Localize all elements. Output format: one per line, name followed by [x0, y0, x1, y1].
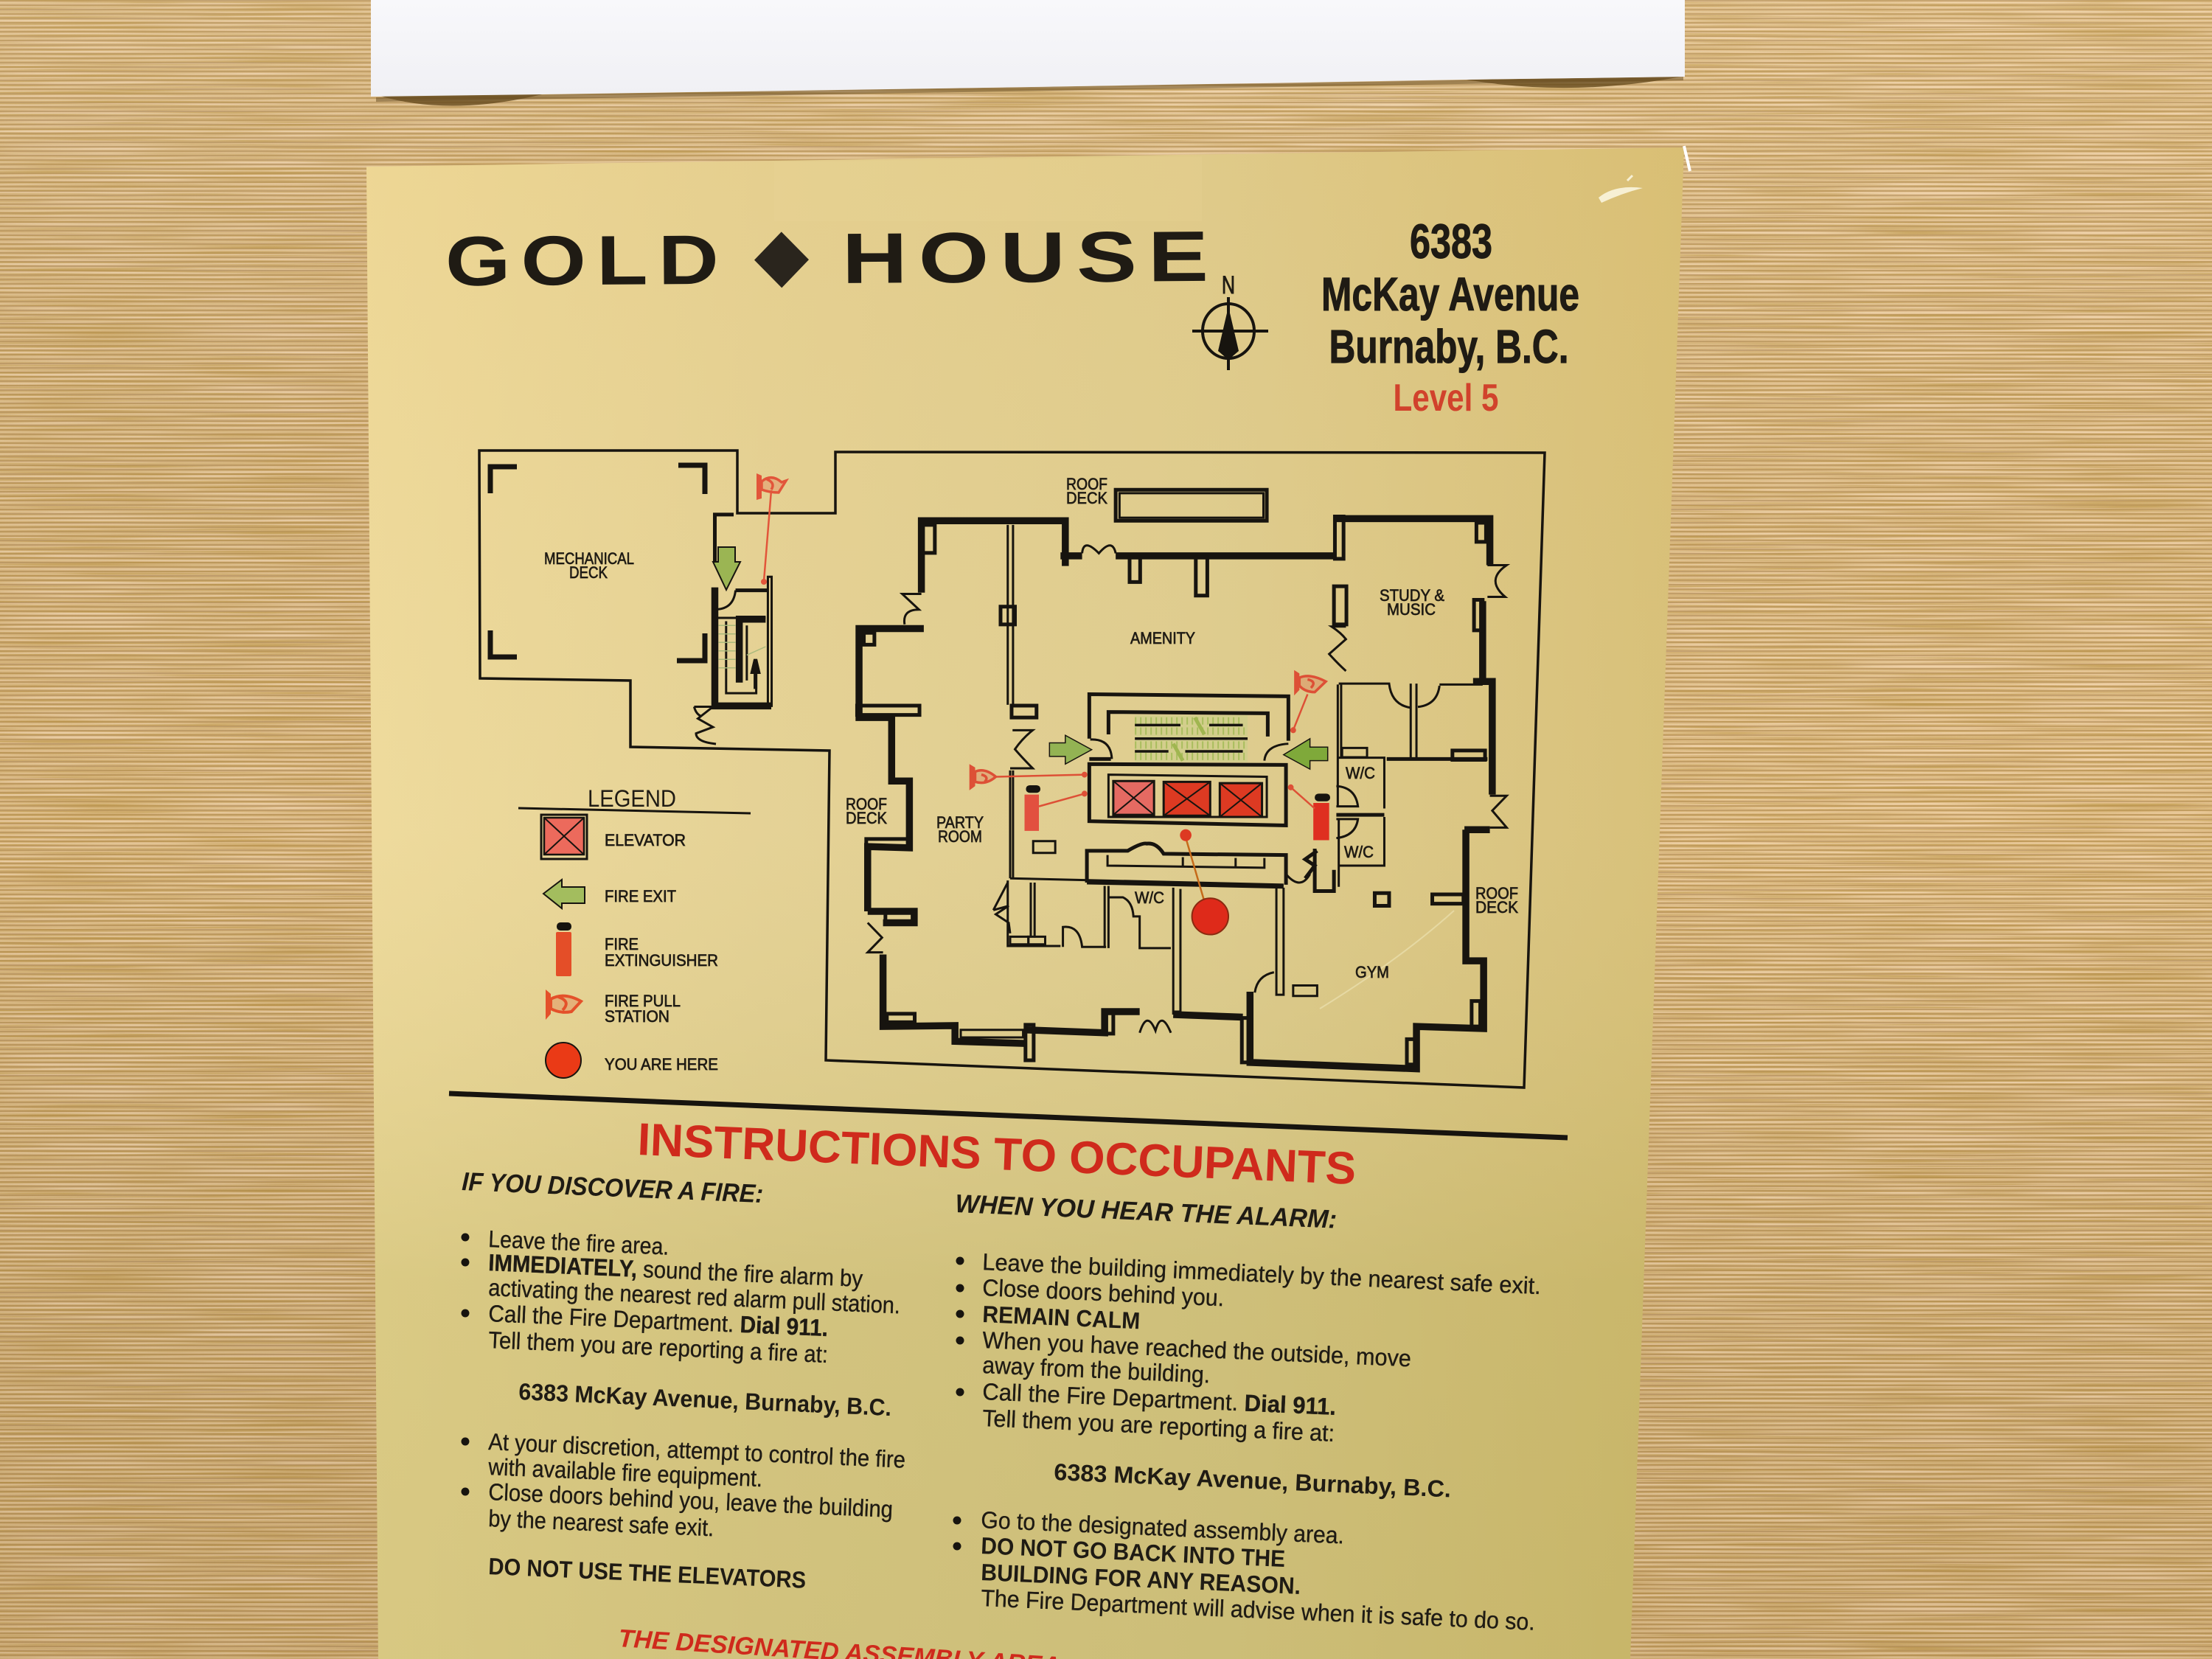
- legend heading: [518, 785, 751, 813]
- instructions: if you discover a fire: Close doors behind you, leave the building: [488, 1478, 894, 1523]
- room labels: ROOM: [938, 827, 982, 846]
- instructions: if you discover a fire: by the nearest safe exit.: [488, 1505, 714, 1541]
- icon: fire pull station at stair: [757, 473, 786, 585]
- legend item: fire extinguisher: [556, 922, 718, 976]
- legend item: fire exit: [543, 880, 676, 908]
- instructions: when you hear the alarm: Call the Fire Department. Dial 911.: [982, 1378, 1337, 1420]
- floor plan: [479, 451, 1545, 1088]
- instructions: if you discover a fire: DO NOT USE THE ELEVATORS: [488, 1553, 807, 1593]
- icon: green exit arrow at stair: [713, 547, 740, 590]
- address block: 6383: [1410, 214, 1492, 268]
- roof deck planter: [1116, 490, 1267, 521]
- instructions: when you hear the alarm: The Fire Department will advise when it is safe to do so.: [981, 1585, 1536, 1635]
- icon: fire pull stations in core: [970, 670, 1326, 790]
- instructions: when you hear the alarm: 6383 McKay Avenue, Burnaby, B.C.: [1054, 1458, 1452, 1503]
- room labels: W/C: [1344, 843, 1374, 861]
- room labels: ROOF: [1066, 475, 1107, 493]
- exit stair: [694, 515, 772, 744]
- instructions: if you discover a fire: 6383 McKay Avenue, Burnaby, B.C.: [518, 1378, 892, 1421]
- left bullets: [462, 1233, 469, 1495]
- instructions: if you discover a fire: Call the Fire Department. Dial 911.: [488, 1300, 829, 1341]
- room labels: [846, 475, 1518, 981]
- room labels: GYM: [1355, 963, 1389, 981]
- address block: [1321, 214, 1579, 420]
- core: stairs: [1089, 695, 1288, 741]
- instructions: if you discover a fire: IF YOU DISCOVER A FIRE:: [462, 1167, 764, 1208]
- instructions: when you hear the alarm: When you have reached the outside, move: [982, 1326, 1412, 1371]
- legend item: you are here: [546, 1043, 718, 1078]
- you are here marker: [1180, 830, 1228, 935]
- address block: McKay Avenue: [1321, 268, 1579, 321]
- legend: [518, 785, 751, 1078]
- instructions: if you discover a fire: At your discretion, attempt to control the fire: [488, 1428, 906, 1473]
- right washrooms: [1336, 684, 1483, 887]
- title: Gold House logo: [445, 216, 1220, 301]
- room labels: AMENITY: [1130, 629, 1195, 647]
- room labels: MUSIC: [1387, 600, 1436, 619]
- instructions: if you discover a fire: IMMEDIATELY, sound the fire alarm by: [488, 1249, 863, 1292]
- double doors: [868, 546, 1506, 1033]
- instructions: when you hear the alarm: Tell them you are reporting a fire at:: [982, 1405, 1335, 1447]
- instructions: when you hear the alarm: Close doors behind you.: [982, 1274, 1225, 1311]
- icon: fire exit arrows at core: [1049, 735, 1328, 769]
- instructions: when you hear the alarm: Leave the building immediately by the nearest safe exit.: [982, 1248, 1542, 1299]
- instructions heading: INSTRUCTIONS TO OCCUPANTS: [636, 1114, 1357, 1194]
- address block: Burnaby, B.C.: [1329, 320, 1569, 373]
- instructions: when you hear the alarm: DO NOT GO BACK INTO THE: [981, 1532, 1286, 1572]
- room labels: W/C: [1346, 764, 1375, 782]
- legend heading: LEGEND: [588, 785, 676, 812]
- instructions: when you hear the alarm: REMAIN CALM: [982, 1301, 1141, 1334]
- instructions: when you hear the alarm: [953, 1189, 1542, 1635]
- core: elevator lobby: [1089, 764, 1286, 825]
- legend item: elevator: ELEVATOR: [605, 831, 686, 849]
- legend item: fire pull station: FIRE PULL: [605, 992, 681, 1010]
- plaque: [366, 146, 1690, 1659]
- mechanical deck: MECHANICAL: [544, 549, 634, 568]
- room labels: DECK: [846, 809, 887, 827]
- room labels: DECK: [1475, 898, 1518, 917]
- room labels: W/C: [1135, 888, 1164, 907]
- icon: fire extinguishers in plan: [1025, 785, 1330, 841]
- exterior walls: [859, 518, 1492, 1069]
- instructions: if you discover a fire: activating the nearest red alarm pull station.: [488, 1274, 901, 1318]
- mechanical deck: [490, 465, 705, 661]
- legend item: fire extinguisher: FIRE: [605, 935, 639, 953]
- white paper sheet above the plaque: [371, 0, 1685, 106]
- legend item: elevator: [541, 815, 686, 859]
- icon: north compass: N: [1222, 271, 1235, 299]
- legend item: you are here: YOU ARE HERE: [605, 1055, 718, 1074]
- building walls: [857, 490, 1506, 1069]
- icon: north compass: [1192, 271, 1268, 370]
- instructions: if you discover a fire: Tell them you are reporting a fire at:: [488, 1326, 829, 1368]
- right bullets: [953, 1256, 964, 1550]
- room labels: DECK: [1066, 489, 1107, 507]
- room labels: PARTY: [936, 813, 984, 832]
- legend item: fire pull station: [546, 990, 681, 1026]
- instructions: if you discover a fire: with available fire equipment.: [487, 1453, 763, 1492]
- scratch over gym: [1320, 911, 1454, 1009]
- instructions: when you hear the alarm: away from the building.: [982, 1352, 1211, 1388]
- instructions: if you discover a fire: [462, 1167, 906, 1593]
- legend item: fire exit: FIRE EXIT: [605, 887, 676, 905]
- instructions: when you hear the alarm: WHEN YOU HEAR THE ALARM:: [955, 1189, 1338, 1234]
- divider rule: [449, 1093, 1568, 1138]
- instructions: when you hear the alarm: BUILDING FOR ANY REASON.: [981, 1559, 1301, 1599]
- legend item: fire pull station: STATION: [605, 1007, 669, 1026]
- elevators: [1113, 781, 1262, 817]
- room labels: ROOF: [846, 795, 887, 813]
- title: Gold House logo: GOLD: [445, 221, 729, 301]
- lower core: [1087, 844, 1286, 887]
- instructions: if you discover a fire: Leave the fire area.: [488, 1225, 669, 1260]
- room labels: STUDY &: [1380, 586, 1444, 605]
- room labels: ROOF: [1475, 884, 1518, 902]
- title: Gold House logo: HOUSE: [842, 216, 1220, 299]
- address block: Level 5: [1394, 377, 1498, 420]
- mechanical deck: DECK: [569, 563, 608, 582]
- partition walls: [1008, 525, 1284, 1015]
- instructions: when you hear the alarm: Go to the designated assembly area.: [981, 1506, 1345, 1548]
- site boundary: [479, 451, 1545, 1088]
- legend item: fire extinguisher: EXTINGUISHER: [605, 951, 718, 970]
